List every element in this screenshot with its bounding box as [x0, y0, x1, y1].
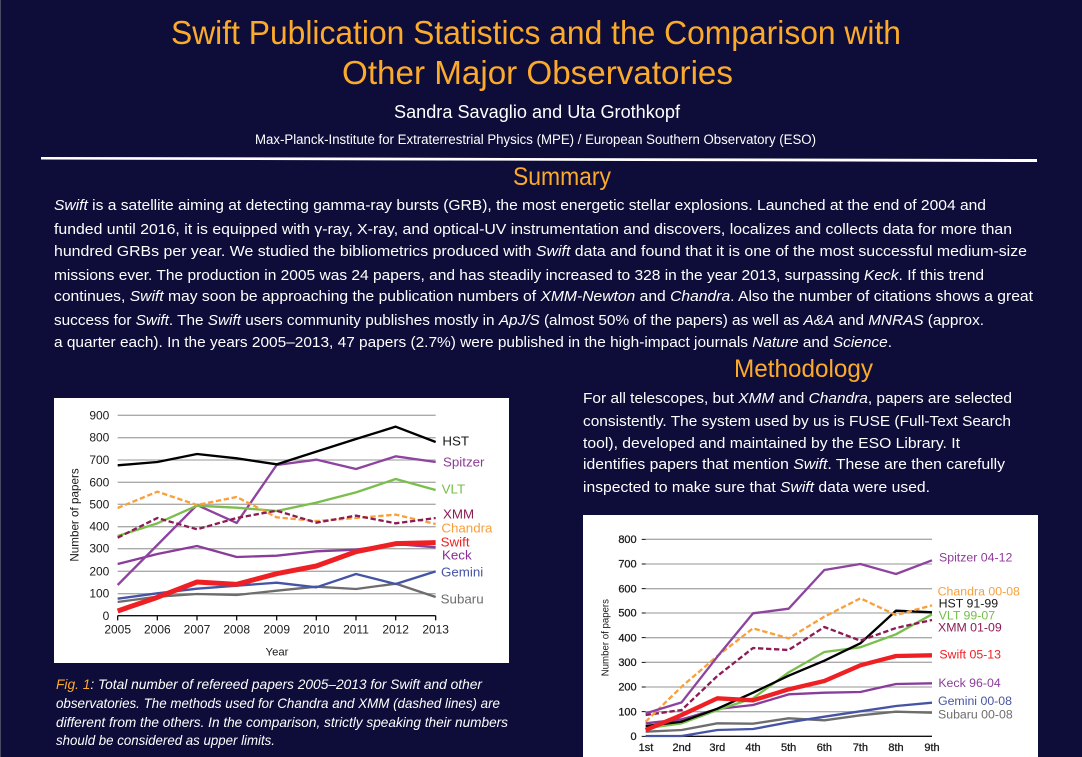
- series labels: Keck: [442, 548, 472, 563]
- panel: figure 1 line chart: [54, 398, 509, 663]
- summary text: success for Swift. The Swift users community publishes mostly in ApJ/S (almost 50% of the papers) as well as A&A and MNRAS (approx.: [54, 312, 984, 329]
- axis title: number of papers: Number of papers: [68, 468, 81, 562]
- summary text: [54, 197, 1034, 351]
- series labels: HST: [442, 434, 469, 449]
- x axis labels: 2009: [263, 623, 290, 637]
- title: [171, 14, 901, 91]
- figure 1 caption: different from the others. In the comparison, strictly speaking their numbers: [56, 714, 508, 730]
- axis title: number of papers: Number of papers: [600, 599, 611, 676]
- x axis labels: 2006: [144, 623, 171, 637]
- series labels: [938, 551, 1020, 722]
- y axis labels: 500: [89, 497, 110, 511]
- y axis labels: 200: [89, 564, 110, 578]
- authors: Sandra Savaglio and Uta Grothkopf: [394, 102, 681, 122]
- series labels: Gemini: [441, 564, 483, 579]
- y axis labels: 400: [618, 632, 637, 644]
- y axis labels: 100: [89, 587, 110, 601]
- y axis labels: 500: [618, 608, 637, 620]
- affiliation: Max-Planck-Institute for Extraterrestrial Physics (MPE) / European Southern Observatory (ESO): [255, 132, 816, 147]
- series lines: [118, 427, 436, 611]
- x axis labels: 8th: [888, 742, 904, 754]
- y axis labels: [89, 408, 110, 623]
- x axis labels: 7th: [853, 742, 868, 754]
- y axis labels: 700: [89, 453, 110, 467]
- y axis labels: 100: [618, 706, 637, 718]
- series labels: Swift: [441, 535, 470, 550]
- series labels: XMM: [443, 507, 474, 522]
- x axis labels: 3rd: [709, 742, 725, 754]
- panel: figure 2 line chart: [583, 515, 1038, 757]
- summary text: missions ever. The production in 2005 was 24 papers, and has steadily increased to 328 in the year 2013, surpassing Keck. If this trend: [54, 267, 984, 284]
- summary text: funded until 2016, it is equipped with γ-ray, X-ray, and optical-UV instrumentation and discovers, localizes and collects data for more than: [54, 221, 1012, 238]
- y axis labels: 900: [89, 408, 110, 422]
- series labels: Chandra: [441, 521, 493, 536]
- y axis labels: 200: [618, 682, 637, 694]
- y axis labels: 400: [89, 520, 110, 534]
- methodology text: inspected to make sure that Swift data were used.: [583, 479, 930, 496]
- methodology text: tool), developed and maintained by the ESO Library. It: [583, 435, 961, 452]
- series labels: Subaru 00-08: [938, 708, 1013, 722]
- series labels: Subaru: [441, 592, 484, 607]
- series labels: Gemini 00-08: [938, 694, 1012, 708]
- axis title: year: Year: [266, 647, 289, 659]
- x axis labels: 2007: [184, 623, 211, 637]
- y axis labels: 0: [103, 609, 110, 623]
- y axis labels: 700: [618, 559, 637, 571]
- summary text: continues, Swift may soon be approaching the publication numbers of XMM-Newton and Chandra. Also the number of citations shows a great: [54, 288, 1034, 305]
- series labels: VLT: [442, 482, 465, 497]
- figure 1 caption: [56, 676, 508, 748]
- x axis labels: 2012: [382, 623, 409, 637]
- x axis labels: 2008: [223, 623, 250, 637]
- x axis labels: [639, 742, 940, 754]
- methodology text: consistently. The system used by us is FUSE (Full-Text Search: [583, 413, 1011, 430]
- series labels: VLT 99-07: [939, 609, 995, 623]
- heading: methodology: Methodology: [734, 355, 873, 383]
- series labels: Chandra 00-08: [938, 585, 1020, 599]
- summary text: hundred GRBs per year. We studied the bibliometrics produced with Swift data and found that it is one of the most successful medium-size: [54, 243, 1027, 260]
- summary text: Swift is a satellite aiming at detecting gamma-ray bursts (GRB), the most energetic stellar explosions. Launched at the end of 2004 and: [54, 197, 986, 214]
- methodology text: [583, 390, 1012, 496]
- x axis labels: 2010: [303, 623, 330, 637]
- y axis labels: 300: [618, 657, 637, 669]
- figure 1 caption: observatories. The methods used for Chandra and XMM (dashed lines) are: [56, 695, 500, 711]
- figure 1 caption: should be considered as upper limits.: [56, 732, 275, 748]
- series lines: [646, 560, 932, 736]
- y axis labels: 600: [89, 475, 110, 489]
- series labels: [441, 434, 493, 607]
- x axis labels: 2005: [104, 623, 131, 637]
- x axis labels: 6th: [817, 742, 832, 754]
- methodology text: For all telescopes, but XMM and Chandra, papers are selected: [583, 390, 1012, 407]
- title: Swift Publication Statistics and the Comparison with: [171, 14, 901, 51]
- methodology text: identifies papers that mention Swift. These are then carefully: [583, 456, 1006, 473]
- y axis labels: 800: [89, 431, 110, 445]
- x axis labels: 2011: [343, 623, 369, 637]
- x axis labels: 5th: [781, 742, 796, 754]
- y axis labels: [618, 534, 637, 743]
- heading: summary: Summary: [513, 163, 611, 191]
- series labels: Spitzer 04-12: [939, 551, 1012, 565]
- y axis labels: 300: [89, 542, 110, 556]
- y axis labels: 800: [618, 534, 637, 546]
- x axis labels: 1st: [639, 742, 653, 754]
- x axis labels: 4th: [745, 742, 761, 754]
- series labels: XMM 01-09: [938, 621, 1002, 635]
- x axis labels: [104, 623, 449, 637]
- x axis labels: 2nd: [673, 742, 691, 754]
- x axis labels: 9th: [924, 742, 940, 754]
- series labels: Spitzer: [443, 455, 485, 470]
- series labels: Swift 05-13: [939, 648, 1001, 662]
- series labels: HST 91-99: [939, 597, 998, 611]
- series labels: Keck 96-04: [938, 676, 1001, 690]
- title: Other Major Observatories: [342, 54, 733, 91]
- figure 1 caption: Fig. 1: Total number of refereed papers 2005–2013 for Swift and other: [56, 676, 483, 692]
- y axis labels: 0: [631, 731, 637, 743]
- y axis labels: 600: [618, 583, 637, 595]
- x axis labels: 2013: [422, 623, 449, 637]
- summary text: a quarter each). In the years 2005–2013, 47 papers (2.7%) were published in the high-impact journals Nature and Science.: [54, 334, 892, 351]
